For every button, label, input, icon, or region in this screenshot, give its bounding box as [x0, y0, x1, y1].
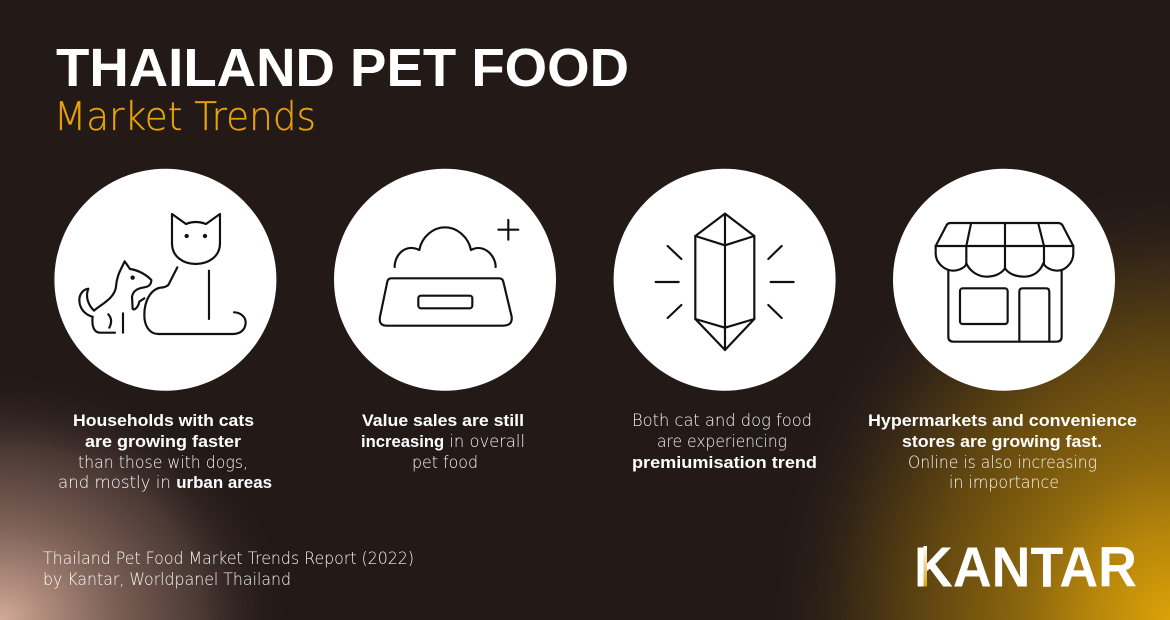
- panel: stores: [868, 169, 1137, 492]
- text: premiumisation: Both cat and dog food: [632, 411, 812, 430]
- panel: cats households: [54, 169, 276, 492]
- text: stores: Online is also increasing: [908, 453, 1097, 472]
- icon circle: cat and dog: [54, 169, 276, 391]
- text: stores: Hypermarkets and convenience: [868, 411, 1137, 430]
- text: cats households: [58, 411, 272, 492]
- text: premiumisation: are experiencing: [657, 432, 787, 451]
- title: THAILAND PET FOOD: [56, 38, 629, 98]
- icon: store: [936, 223, 1073, 342]
- panel: value sales: [334, 169, 556, 472]
- logo: Kantar: KANTAR: [914, 536, 1137, 600]
- text: premiumisation: [632, 411, 817, 472]
- icon circle: food bowl: [334, 169, 556, 391]
- text: value sales: pet food: [412, 453, 478, 472]
- text: stores: stores are growing fast.: [902, 432, 1102, 451]
- text: cats households: Households with cats: [73, 411, 254, 430]
- text: value sales: Value sales are still: [362, 411, 524, 430]
- text: stores: in importance: [949, 473, 1059, 492]
- text: cats households: than those with dogs,: [78, 453, 248, 472]
- icon: cat and dog: [79, 214, 246, 334]
- subtitle: Market Trends: [54, 95, 316, 140]
- source note: by Kantar, Worldpanel Thailand: [43, 570, 291, 589]
- panel: premiumisation: [614, 169, 836, 472]
- icon: food bowl: [380, 220, 518, 326]
- text: cats households: are growing faster: [85, 432, 241, 451]
- text: cats households: and mostly in urban areas: [58, 473, 272, 492]
- text: value sales: increasing in overall: [361, 432, 525, 451]
- text: value sales: [361, 411, 525, 472]
- text: stores: [868, 411, 1137, 492]
- icon: crystal: [656, 214, 794, 350]
- source note: [43, 549, 414, 589]
- icon circle: crystal: [614, 169, 836, 391]
- text: premiumisation: premiumisation trend: [632, 453, 817, 472]
- source note: Thailand Pet Food Market Trends Report (2022): [43, 549, 414, 568]
- icon circle: store: [893, 169, 1115, 391]
